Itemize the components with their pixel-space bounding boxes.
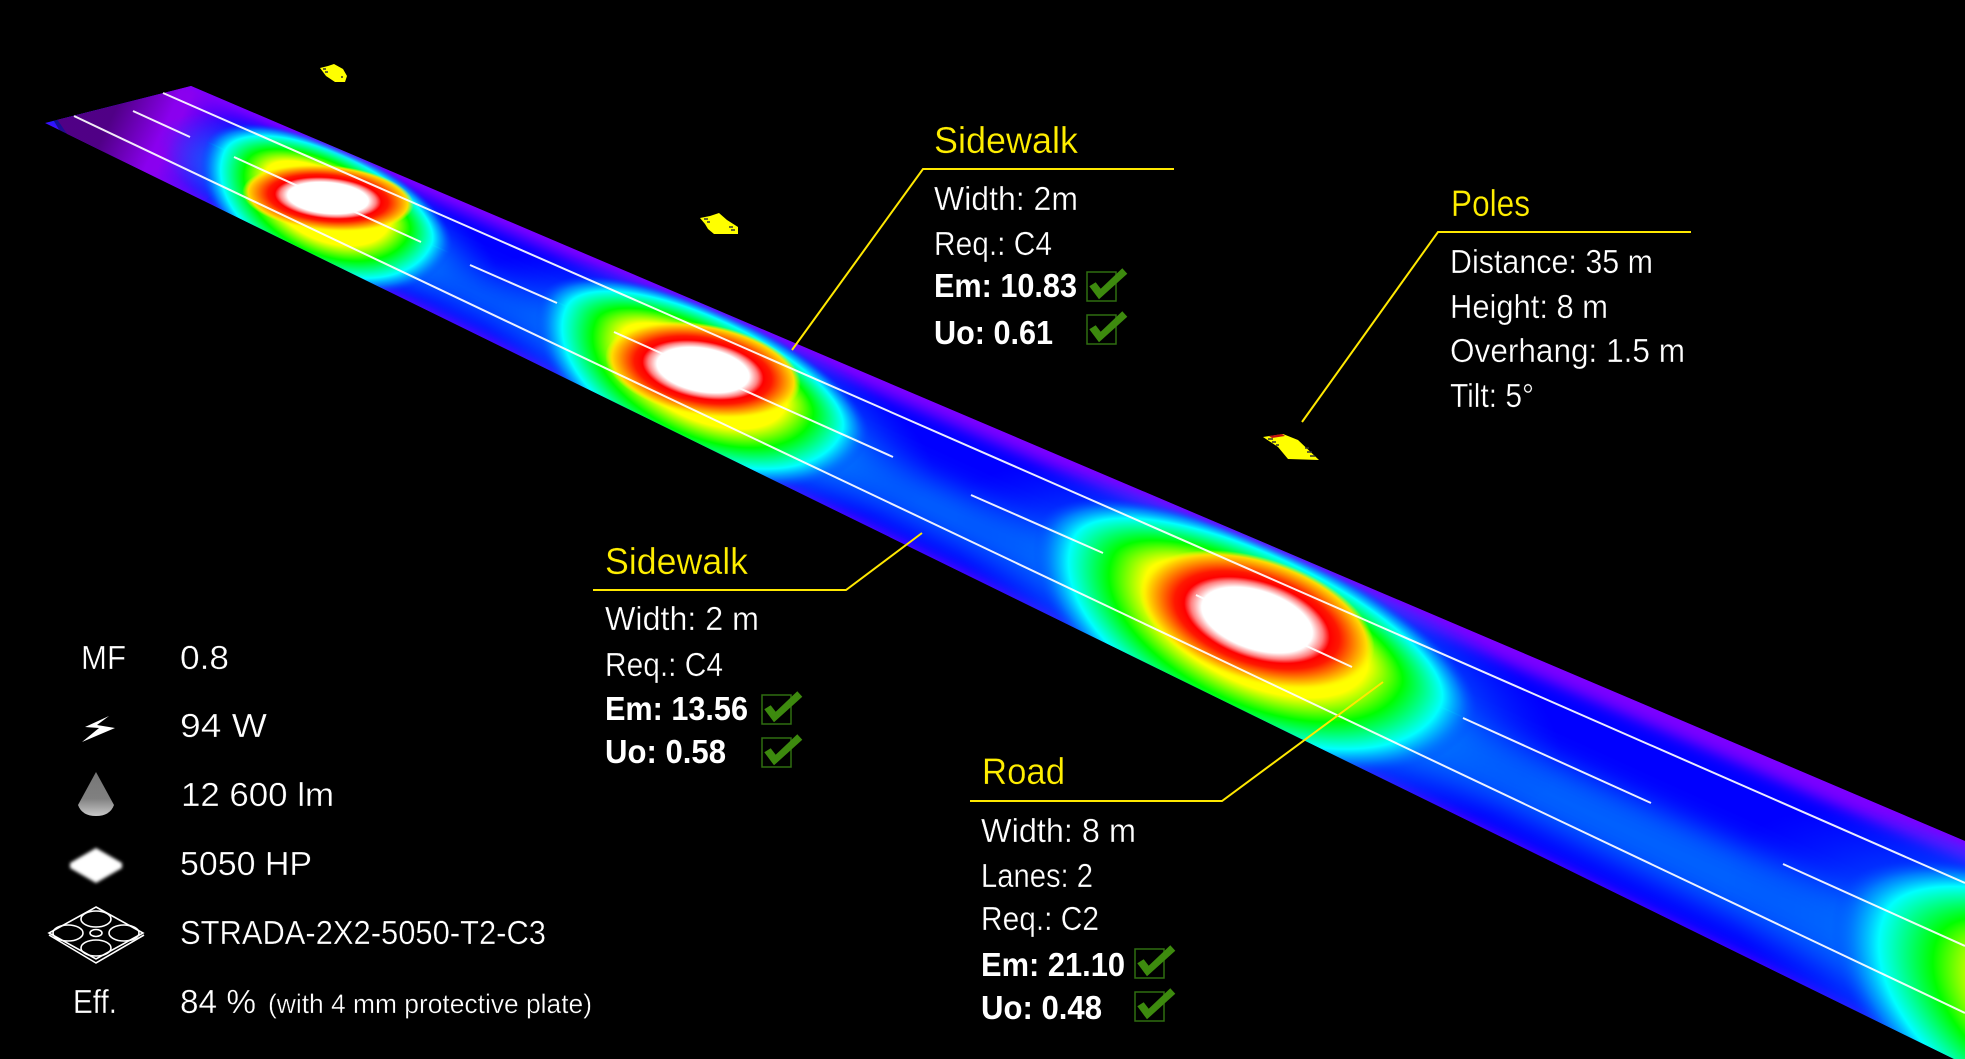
- requirement: Req.: C4: [934, 225, 1052, 262]
- start of road: purple fade: [57, 86, 250, 201]
- width: Width: 8 m: [981, 812, 1136, 849]
- callout: poles: [1302, 183, 1691, 422]
- centre dash 5: [971, 495, 1103, 553]
- pool 1 lower halo: [204, 142, 446, 292]
- heading: Sidewalk: [934, 120, 1078, 161]
- pool 4 upper halo: [1851, 864, 1965, 946]
- efficiency value: 84 %: [180, 983, 256, 1020]
- requirement: Req.: C2: [981, 900, 1099, 937]
- icon: light cone: [78, 772, 114, 816]
- Uo value: Uo: 0.58: [605, 733, 726, 770]
- icon: lens module: [49, 907, 144, 963]
- pool 1 core: [242, 165, 414, 230]
- callout: sidewalk upper: [792, 120, 1174, 351]
- check Uo: [1135, 988, 1175, 1021]
- centre dash 4: [614, 332, 893, 457]
- pool 3 lower halo: [1044, 526, 1465, 770]
- pool 2 lower halo: [544, 298, 860, 486]
- heading: Sidewalk: [605, 541, 748, 582]
- distance: Distance: 35 m: [1450, 243, 1653, 280]
- pool 1 upper halo: [209, 125, 450, 251]
- Em value: Em: 13.56: [605, 690, 748, 727]
- callout: road: [970, 682, 1383, 1026]
- LED value: 5050 HP: [180, 845, 312, 882]
- icon: LED chip: [70, 848, 122, 883]
- luminaire specification panel: [49, 639, 592, 1020]
- pool 2 upper halo: [546, 278, 865, 441]
- pole 2: [700, 213, 738, 234]
- Em value: Em: 21.10: [981, 946, 1125, 983]
- centre dash 2: [234, 157, 421, 242]
- overhang: Overhang: 1.5 m: [1450, 332, 1685, 369]
- centre dash 1: [133, 111, 190, 137]
- check Em: [1087, 268, 1127, 301]
- width: Width: 2m: [934, 180, 1078, 217]
- centre dash 8: [1783, 864, 1965, 946]
- pole 1: [320, 64, 347, 82]
- callout: sidewalk lower: [593, 533, 922, 770]
- optics value: STRADA-2X2-5050-T2-C3: [180, 914, 546, 951]
- heading: Poles: [1451, 183, 1530, 224]
- check Uo: [1087, 311, 1127, 344]
- upper edge: purple rim: [186, 86, 1965, 846]
- lanes: Lanes: 2: [981, 857, 1093, 894]
- pool 3 upper halo: [1046, 500, 1472, 718]
- centre dash 7: [1463, 718, 1651, 803]
- pool 4 lower halo: [1848, 896, 1965, 1059]
- Em value: Em: 10.83: [934, 267, 1077, 304]
- power value: 94 W: [180, 707, 268, 744]
- leader line: [1302, 232, 1691, 422]
- centre dash 6: [1196, 595, 1352, 667]
- requirement: Req.: C4: [605, 646, 723, 683]
- start of road: dark fade: [54, 90, 176, 169]
- azure glow around pool 2: [508, 263, 915, 505]
- leader line: [593, 533, 922, 590]
- MF label: MF: [81, 639, 126, 676]
- flux value: 12 600 lm: [181, 776, 334, 813]
- width: Width: 2 m: [605, 600, 759, 637]
- efficiency note: (with 4 mm protective plate): [268, 989, 592, 1019]
- tilt: Tilt: 5°: [1450, 377, 1534, 414]
- height: Height: 8 m: [1450, 288, 1608, 325]
- check Uo: [762, 734, 802, 767]
- centre dash 3: [470, 265, 557, 303]
- Uo value: Uo: 0.61: [934, 314, 1053, 351]
- MF value: 0.8: [180, 639, 229, 676]
- leader line: [970, 682, 1383, 801]
- azure glow around pool 3: [990, 473, 1539, 804]
- Uo value: Uo: 0.48: [981, 989, 1102, 1026]
- pole 3: [1263, 434, 1319, 460]
- upper edge line: [163, 93, 1965, 883]
- check Em: [762, 691, 802, 724]
- pool 2 core: [606, 322, 800, 417]
- azure glow around pool 4: [1772, 816, 1965, 1059]
- check Em: [1135, 945, 1175, 978]
- heading: Road: [982, 751, 1065, 792]
- leader line: [792, 169, 1174, 350]
- road base: azure lower band: [46, 103, 1858, 988]
- pool 3 core: [1142, 550, 1374, 688]
- efficiency label: Eff.: [73, 983, 117, 1020]
- azure glow around pool 1: [164, 118, 484, 292]
- icon: power bolt: [82, 716, 115, 742]
